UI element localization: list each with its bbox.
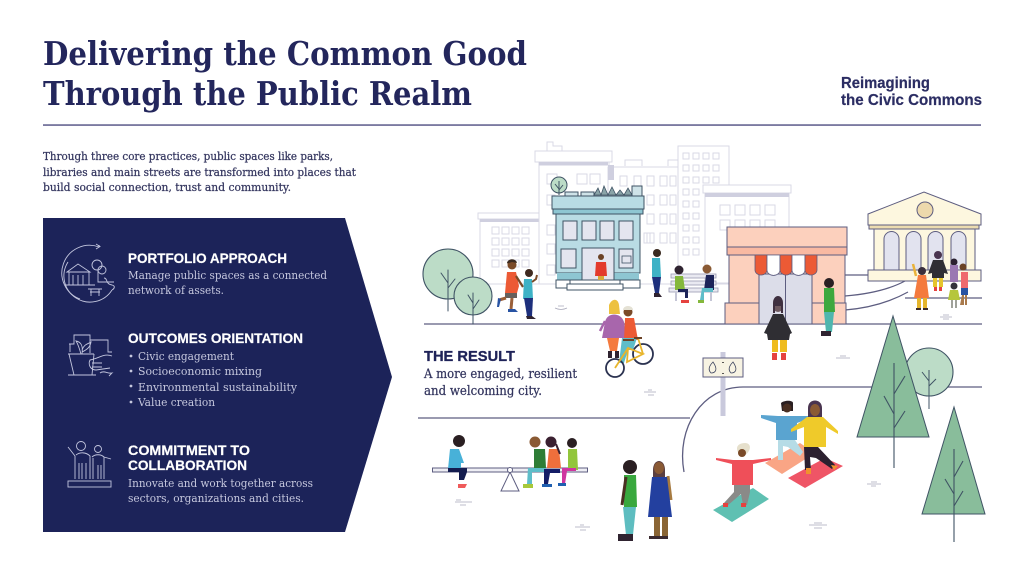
seesaw with kids <box>432 435 588 491</box>
heading: commitment to collaboration <box>128 443 250 473</box>
shop building <box>725 227 847 324</box>
kid: lime <box>558 438 578 486</box>
person: standing teal top <box>652 249 662 297</box>
kid: green <box>523 436 546 488</box>
street lines <box>418 275 982 472</box>
person: running in red <box>497 259 523 312</box>
text: portfolio description <box>128 269 327 297</box>
background buildings <box>478 142 791 284</box>
title: Through the Public Realm <box>43 74 472 113</box>
icon: potted plant and hands <box>68 335 112 376</box>
icon: portfolio circle with building, tree and bench <box>62 244 114 302</box>
building right <box>703 185 791 283</box>
text: portfolio description: Manage public spaces as a connected <box>128 269 327 282</box>
awning <box>755 255 817 275</box>
grass marks <box>455 306 952 530</box>
person: teal top <box>523 269 537 319</box>
building wide <box>608 160 678 284</box>
intro text: libraries and main streets are transformed into places that <box>43 165 356 179</box>
list: outcomes: Value creation <box>137 396 215 409</box>
intro text: Through three core practices, public spaces like parks, <box>43 149 333 163</box>
person: cyclist <box>606 306 653 377</box>
bench with two people <box>669 264 718 303</box>
icon: pine tree two <box>922 407 985 542</box>
heading: commitment to collaboration: COLLABORATION <box>128 458 247 473</box>
heading: outcomes orientation: OUTCOMES ORIENTATION <box>128 331 303 346</box>
building left <box>478 213 542 284</box>
the result text: A more engaged, resilient <box>423 367 578 382</box>
list: outcomes: Socioeconomic mixing <box>138 365 262 378</box>
logo: Reimagining the Civic Commons: Reimagining <box>841 75 930 92</box>
person: child lime <box>948 282 960 308</box>
bicycle <box>606 338 653 377</box>
text: collaboration description: sectors, organizations and cities. <box>128 492 304 505</box>
civic building <box>868 192 981 281</box>
building tall centre <box>535 142 612 284</box>
person: waving orange dress <box>913 264 929 310</box>
heading: commitment to collaboration: COMMITMENT TO <box>128 443 250 458</box>
list: outcomes: Civic engagement <box>138 350 234 363</box>
title: Delivering the Common Good <box>43 34 527 73</box>
icon: round tree <box>905 348 953 409</box>
text: collaboration description: Innovate and work together across <box>128 477 313 490</box>
icon: two people on a platform <box>68 442 111 487</box>
heading: portfolio approach: PORTFOLIO APPROACH <box>128 251 287 266</box>
kid: blue <box>448 435 467 488</box>
text: portfolio description: network of assets. <box>128 284 224 297</box>
person: blue dress standing <box>648 461 672 539</box>
the result text: and welcoming city. <box>424 384 542 399</box>
icon: pine tree one <box>857 316 929 468</box>
the result text <box>423 348 578 399</box>
person in doorway <box>595 254 607 280</box>
person: woman in purple <box>600 300 627 358</box>
yoga mats <box>713 443 843 522</box>
text: collaboration description <box>128 477 313 505</box>
logo: Reimagining the Civic Commons: the Civic Commons <box>841 92 982 109</box>
person: woman in dark top near shop <box>764 296 792 360</box>
building highrise <box>678 146 729 284</box>
intro text: build social connection, trust and community. <box>43 180 291 194</box>
the result text: THE RESULT <box>424 348 515 365</box>
person: child purple <box>950 258 958 282</box>
sign post <box>703 352 743 416</box>
list: outcomes <box>130 350 298 409</box>
panel: core practices arrow <box>43 218 392 532</box>
title <box>43 34 527 113</box>
intro text <box>43 149 356 194</box>
list: outcomes: Environmental sustainability <box>138 381 298 394</box>
icon: rooftop tree and plants <box>551 177 642 196</box>
person: woman dark top <box>928 251 948 291</box>
icon: round trees left <box>423 249 492 324</box>
person: child pink <box>960 264 968 305</box>
right trees <box>857 316 985 542</box>
person: green shirt standing <box>618 460 637 541</box>
person: man in green near shop <box>821 278 835 336</box>
logo: Reimagining the Civic Commons <box>841 75 982 109</box>
person: yoga blue top <box>761 401 808 460</box>
kid: orange <box>542 436 561 487</box>
library building <box>551 177 644 290</box>
person: yoga pink top <box>716 443 771 507</box>
person: yoga yellow top <box>791 400 838 474</box>
